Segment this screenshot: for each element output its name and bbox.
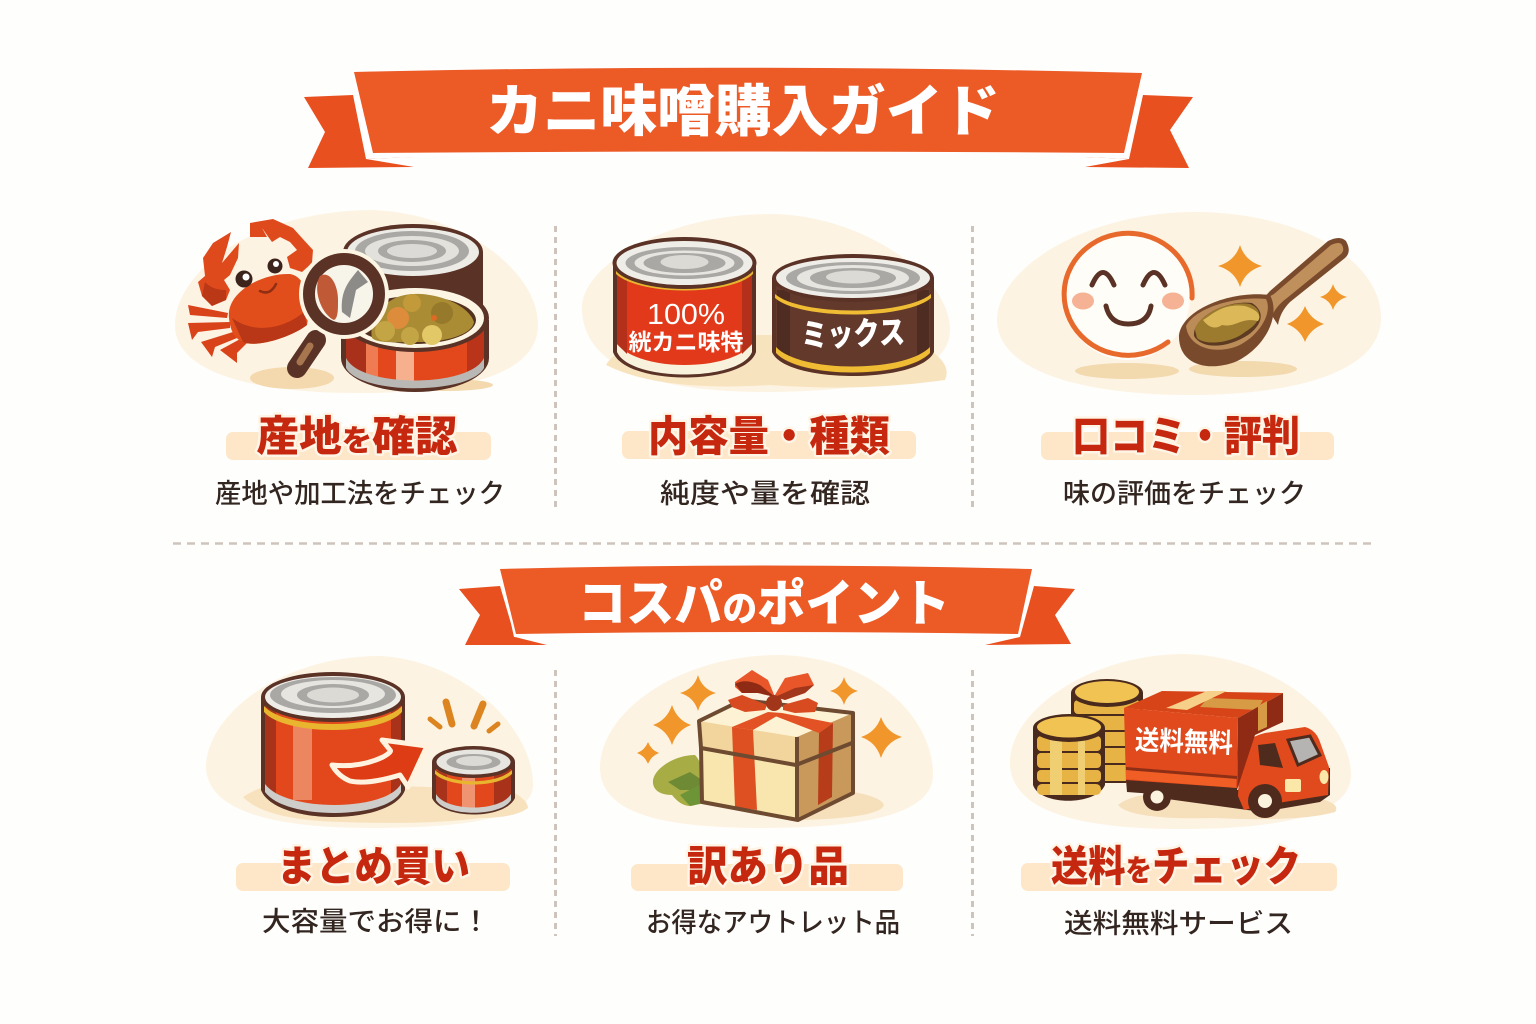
icon: open can with crab miso [341,284,489,392]
description: contents: 純度や量を確認 [660,479,870,509]
panel: reviews [997,212,1381,509]
panel: origin check [175,210,538,509]
truck label: 送料無料 [1134,725,1233,759]
icon: sparkles [637,675,902,764]
icon: sparkles [1218,245,1347,342]
section pill: contents [622,431,916,459]
title text: カニ味噌購入ガイド [486,80,1000,143]
icon: coin stacks [1033,679,1143,801]
illustration background: origin [175,210,538,393]
heading: outlet: 訳あり品 [687,843,849,890]
section pill: bulk [236,863,510,891]
title banner [304,68,1193,168]
heading: contents: 内容量・種類 [648,413,890,460]
illustration background: shipping [1010,654,1351,829]
description: outlet: お得なアウトレット品 [646,908,900,938]
icon: delivery truck [1124,691,1330,818]
icon: brown can mix: ミックス [800,314,906,354]
illustration background: bulk [206,656,533,828]
banner text: コスパのポイント [578,576,950,632]
panel: bulk buying [206,656,533,937]
icon: red can 100 percent: 絖カニ味特 [628,329,744,355]
section pill: shipping [1021,863,1337,891]
icon: magnifying glass [297,249,389,368]
section pill: origin [226,432,491,460]
icon: red can 100 percent [612,237,756,378]
description: origin: 産地や加工法をチェック [215,479,505,509]
icon: crab [188,219,313,363]
icon: smiling face [1064,233,1192,360]
icon: gift box [699,670,853,820]
section pill: outlet [631,864,903,891]
description: shipping: 送料無料サービス [1064,909,1293,939]
heading: shipping: 送料をチェック [1051,843,1301,890]
panel: shipping [1010,654,1351,939]
illustration background: contents [582,214,950,392]
heading: origin: 産地を確認 [256,413,457,460]
illustration background: outlet [600,655,933,828]
icon: back can [343,224,483,312]
cost performance banner [459,564,1075,645]
heading: bulk: まとめ買い [277,843,470,890]
icon: brown can mix [772,254,934,376]
section pill: reviews [1041,432,1334,460]
icon: arrow to small can [332,740,427,787]
description: reviews: 味の評価をチェック [1063,479,1306,509]
heading: reviews: 口コミ・評判 [1072,413,1300,460]
description: bulk: 大容量でお得に！ [262,907,490,937]
icon: wooden spoon with crab miso [1179,238,1349,366]
panel: outlet items [600,655,933,938]
icon: red can 100 percent: 100% [647,299,725,331]
icon: green moss [653,755,705,806]
icon: bow [728,670,818,713]
icon: small can [432,746,515,814]
icon: emphasis rays [430,702,498,731]
illustration background: reviews [997,212,1381,395]
panel: contents and type [582,214,950,509]
icon: large can [261,672,405,817]
